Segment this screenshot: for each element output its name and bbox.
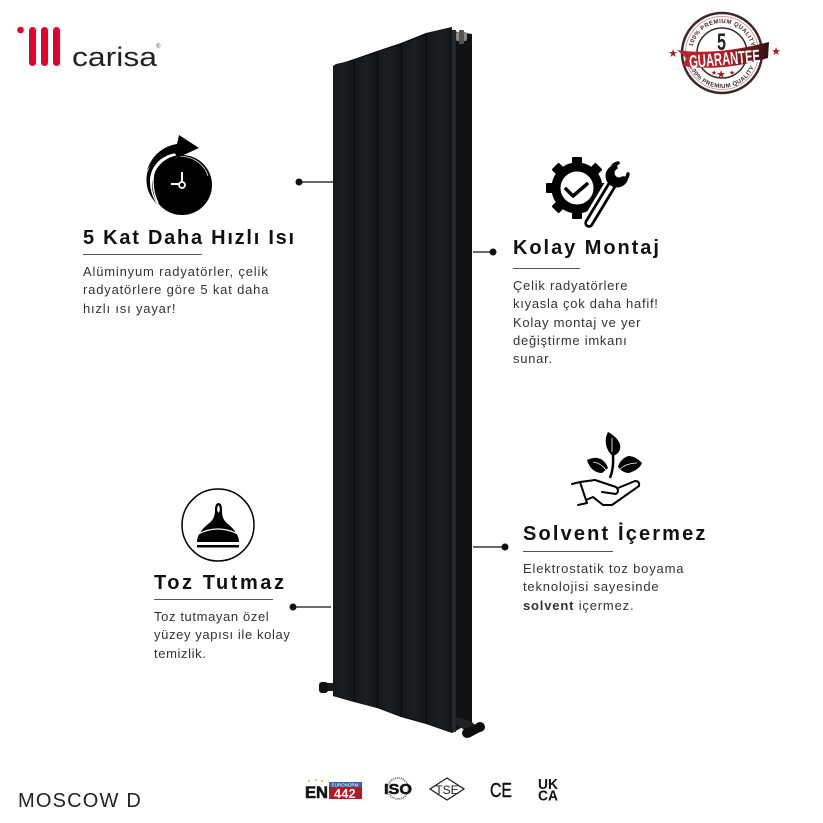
certification: EN 442: EURONORM xyxy=(332,782,359,788)
guarantee badge xyxy=(668,12,781,94)
text: montaj: sunar. xyxy=(513,351,553,366)
text: heat xyxy=(83,264,269,316)
text: dust: temizlik. xyxy=(154,646,207,661)
text: dust: Toz tutmayan özel xyxy=(154,609,269,624)
icon: dust brush xyxy=(182,489,254,561)
certification: TSE: TSE xyxy=(435,783,459,797)
heading: Kolay Montaj: Kolay Montaj xyxy=(513,237,661,259)
text: montaj: Kolay montaj ve yer xyxy=(513,315,641,330)
connector: dust xyxy=(290,604,331,610)
valve top xyxy=(456,30,467,44)
certification: EN 442: EN xyxy=(305,783,328,802)
heading: 5 Kat Daha Hızlı Isı: 5 Kat Daha Hızlı Isı xyxy=(83,227,296,249)
text: heat: radyatörlere göre 5 kat daha xyxy=(83,282,269,297)
heading: Toz Tutmaz: Toz Tutmaz xyxy=(154,572,287,594)
text: solvent: Elektrostatik toz boyama xyxy=(523,561,684,576)
text: dust xyxy=(154,609,290,661)
connector: solvent xyxy=(473,544,508,550)
guarantee badge: GUARANTEE xyxy=(688,46,761,72)
guarantee badge: ★ xyxy=(668,47,678,60)
certification: UKCA xyxy=(538,776,558,804)
valve left bottom xyxy=(319,682,333,693)
text: dust: yüzey yapısı ile kolay xyxy=(154,627,290,642)
text: montaj xyxy=(513,278,659,366)
text: heat: Alüminyum radyatörler, çelik xyxy=(83,264,269,279)
certification: UKCA: CA xyxy=(538,788,558,804)
text: solvent: solvent içermez. xyxy=(523,598,634,613)
text: solvent: teknolojisi sayesinde xyxy=(523,579,659,594)
text: montaj: değiştirme imkanı xyxy=(513,333,627,348)
text: montaj: Çelik radyatörlere xyxy=(513,278,628,293)
text: montaj: kıyasla çok daha hafif! xyxy=(513,296,659,311)
logo mark xyxy=(17,27,60,66)
guarantee badge: 100% PREMIUM QUALITY xyxy=(689,18,756,46)
icon: gear and wrench xyxy=(546,157,634,223)
icon: clock with arrow xyxy=(146,135,212,215)
certification: ISO xyxy=(384,778,412,799)
certification: ISO: ISO xyxy=(384,782,412,798)
rear side column xyxy=(452,31,472,733)
certification: TSE xyxy=(430,778,464,800)
connector: heat xyxy=(296,179,333,185)
panel base xyxy=(333,27,452,733)
connector: montaj xyxy=(473,249,496,255)
guarantee badge: ★ xyxy=(771,45,781,58)
guarantee badge: ★ xyxy=(711,69,717,77)
guarantee badge: 100% PREMIUM QUALITY xyxy=(690,66,754,88)
guarantee badge: ★ xyxy=(729,69,735,77)
logo wordmark: carisa xyxy=(72,42,158,72)
icon: plant in hand xyxy=(572,432,642,505)
certification: EN 442: 442 xyxy=(334,787,356,801)
certification: CE: CE xyxy=(490,780,512,802)
panels xyxy=(333,60,354,702)
guarantee badge: ★ xyxy=(716,68,726,81)
valve right bottom xyxy=(456,717,485,739)
registered mark: ® xyxy=(156,43,161,50)
heading: Solvent İçermez: Solvent İçermez xyxy=(523,523,708,545)
certification: UKCA: UK xyxy=(538,776,558,793)
model name: MOSCOW D xyxy=(18,790,142,812)
text: solvent xyxy=(523,561,684,613)
guarantee badge: 5 xyxy=(717,29,726,56)
certification: EN 442 xyxy=(305,779,362,802)
text: heat: hızlı ısı yayar! xyxy=(83,301,176,316)
